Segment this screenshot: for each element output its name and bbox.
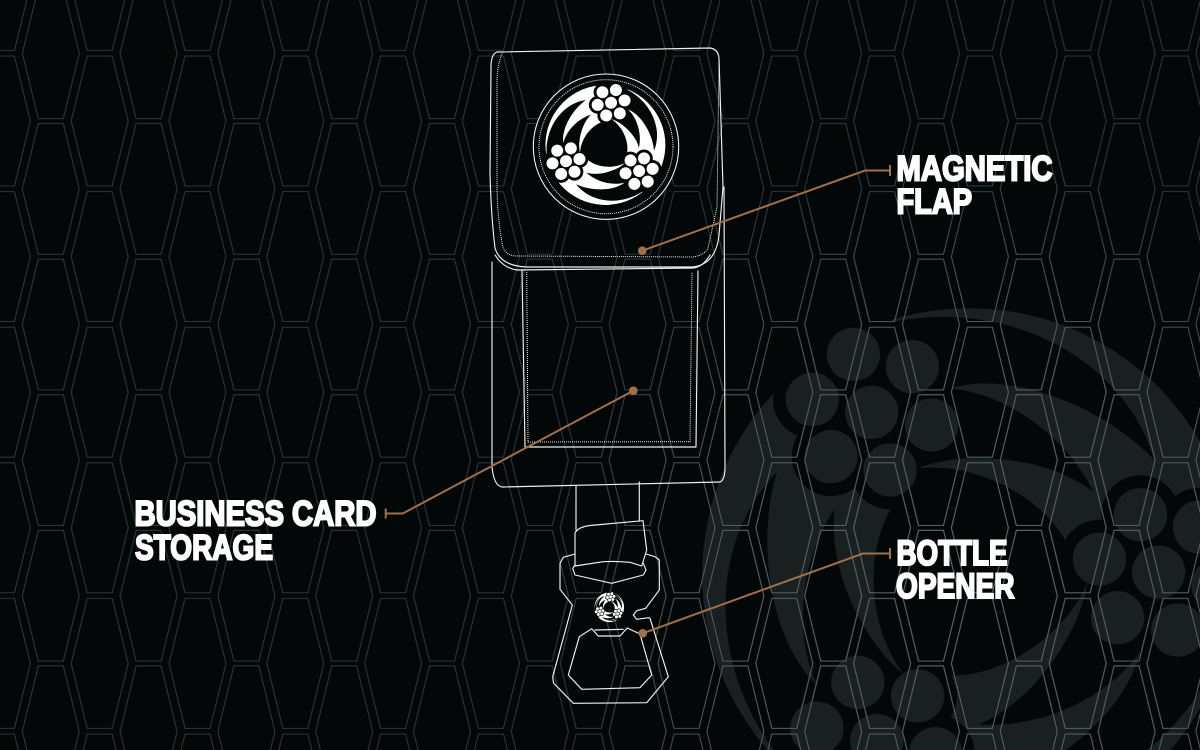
leader: magnetic flap bbox=[638, 165, 890, 255]
leader: business card storage bbox=[386, 386, 638, 518]
label: bottle opener bbox=[896, 533, 1014, 606]
label: bottle opener: OPENER bbox=[896, 566, 1014, 606]
strap bbox=[575, 482, 647, 566]
label: magnetic flap: MAGNETIC bbox=[896, 149, 1052, 189]
bottle opener clip bbox=[553, 554, 668, 703]
label: bottle opener: BOTTLE bbox=[896, 533, 1008, 573]
label: magnetic flap: FLAP bbox=[896, 181, 972, 221]
body bbox=[492, 187, 725, 487]
label: business card storage: STORAGE bbox=[135, 528, 273, 568]
product outline bbox=[490, 48, 725, 703]
leader: bottle opener bbox=[638, 548, 890, 638]
label: business card storage: BUSINESS CARD bbox=[134, 494, 376, 534]
label: business card storage bbox=[134, 494, 376, 568]
flap logo bbox=[492, 48, 700, 253]
card pocket bbox=[522, 271, 698, 447]
watermark logo bbox=[608, 308, 1200, 750]
clip logo bbox=[581, 583, 633, 634]
label: magnetic flap bbox=[896, 149, 1052, 221]
flap bbox=[490, 48, 723, 270]
